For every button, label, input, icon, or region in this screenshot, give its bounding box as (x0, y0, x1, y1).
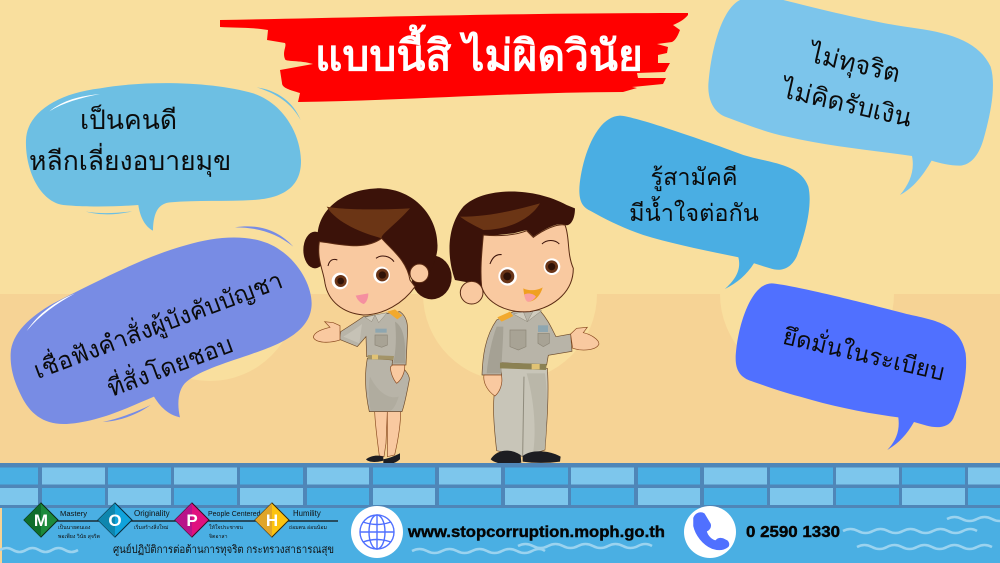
MOPH values: People Centered: ให้ใจประชาชน (209, 524, 243, 531)
website address: www.stopcorruption.moph.go.th (407, 524, 665, 541)
speech bubble: no corruption (708, 0, 993, 195)
MOPH values: Mastery (24, 503, 100, 540)
speech bubble: no corruption: ไม่คิดรับเงิน (777, 74, 915, 133)
MOPH values: Originality: Originality (134, 509, 170, 518)
MOPH values: People Centered (175, 503, 261, 540)
MOPH values: Humility: ถ่อมตน อ่อนน้อม (289, 524, 327, 531)
speech bubble: obey orders: ที่สั่งโดยชอบ (103, 328, 237, 403)
speech bubble: be a good person (26, 83, 301, 231)
MOPH values: Mastery: Mastery (60, 509, 87, 518)
MOPH values: People Centered: People Centered (208, 511, 261, 518)
telephone number: 0 2590 1330 (746, 524, 840, 541)
speech bubble: unity (579, 116, 810, 289)
MOPH values: Humility: H (266, 511, 278, 530)
MOPH values: Originality (98, 503, 170, 537)
title banner (220, 13, 688, 102)
icon: telephone (684, 506, 736, 558)
speech bubble: obey orders: เชื่อฟังคำสั่งผู้บังคับบัญชา (29, 263, 287, 386)
MOPH values: Originality: O (108, 511, 122, 530)
title text: แบบนี้สิ ไม่ผิดวินัย (315, 24, 643, 80)
speech bubble: be a good person: เป็นคนดี (80, 103, 177, 135)
speech bubble: unity: รู้สามัคคี (650, 164, 738, 192)
brick wall (0, 463, 1000, 509)
speech bubble: discipline (736, 283, 966, 450)
MOPH values: Mastery: เป็นนายตนเอง (58, 523, 91, 531)
MOPH values: People Centered: P (186, 511, 198, 530)
speech bubble: obey orders (11, 226, 312, 424)
MOPH values: Mastery: M (34, 511, 48, 530)
MOPH values: Humility: Humility (293, 509, 321, 518)
speech bubble: be a good person: หลีกเลี่ยงอบายมุข (29, 143, 231, 177)
speech bubble: unity: มีน้ำใจต่อกัน (629, 196, 759, 226)
male officer character (450, 191, 599, 464)
MOPH values: Mastery: พอเพียง วินัย สุจริต (58, 533, 100, 540)
MOPH values: People Centered: จิตอาสา (209, 533, 228, 540)
organisation name: ศูนย์ปฏิบัติการต่อต้านการทุจริต กระทรวงสาธารณสุข (113, 543, 334, 556)
MOPH values: Humility (255, 503, 327, 537)
MOPH values: Originality: เริ่มสร้างสิ่งใหม่ (134, 524, 168, 531)
speech bubble: discipline: ยึดมั่นในระเบียบ (780, 319, 948, 385)
speech bubble: no corruption: ไม่ทุจริต (805, 39, 903, 89)
female officer character (303, 188, 452, 464)
footer band (0, 508, 1000, 563)
icon: globe (351, 506, 403, 558)
